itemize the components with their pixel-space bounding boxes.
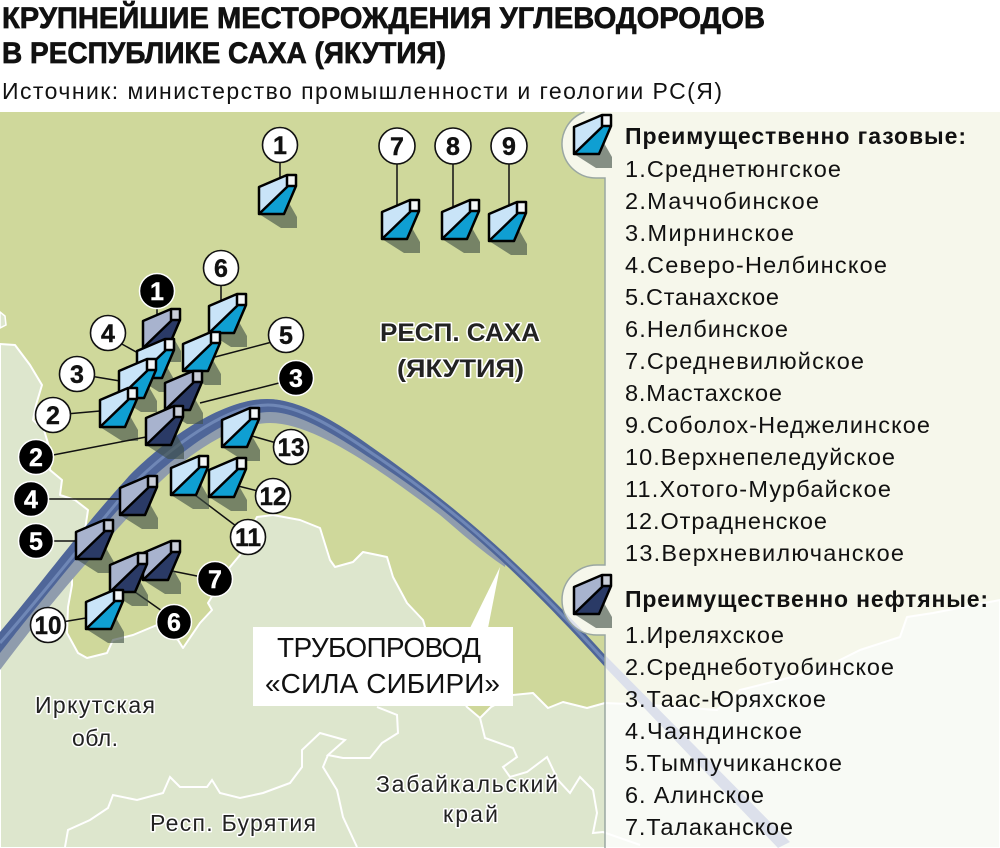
oil field 7 — [143, 541, 232, 596]
callout: pipeline label: «СИЛА СИБИРИ» — [265, 668, 500, 699]
legend: oil fields: 2.Среднеботуобинское — [625, 654, 894, 680]
legend: gas fields: 7.Средневилюйское — [625, 348, 864, 374]
legend: gas fields: 2.Маччобинское — [625, 188, 819, 214]
gas field 1 north: 1 — [273, 132, 287, 160]
gas field 10: 10 — [34, 612, 62, 640]
region label: Sakha: РЕСП. САХА — [380, 319, 540, 347]
gas field 12 — [209, 458, 290, 514]
gas field 6: 6 — [214, 255, 228, 283]
oil field 3: 3 — [289, 365, 303, 393]
gas field 9: 9 — [502, 133, 516, 161]
legend: gas fields: 13.Верхневилючанское — [625, 540, 904, 566]
region label: Buryatia: Респ. Бурятия — [150, 810, 316, 836]
pipeline "Power of Siberia" — [0, 399, 790, 848]
legend: gas fields: 10.Верхнепеледуйское — [625, 444, 895, 470]
legend: oil fields: 3.Таас-Юряхское — [625, 686, 826, 712]
gas field 13 — [222, 408, 308, 464]
legend: oil fields: 4.Чаяндинское — [625, 718, 802, 744]
gas field 4: 4 — [101, 320, 115, 348]
gas field 13: 13 — [278, 434, 304, 462]
panel edge — [562, 112, 605, 848]
legend: oil fields — [625, 586, 988, 840]
gas field 6 — [204, 250, 247, 347]
region label: Irkutsk: Иркутская — [35, 692, 155, 718]
legend: oil fields: 5.Тымпучиканское — [625, 750, 842, 776]
right legend panel — [562, 112, 1000, 848]
legend: gas fields — [625, 123, 966, 566]
source line: Источник: министерство промышленности и геологии РС(Я) — [2, 78, 722, 104]
region label: Sakha — [380, 319, 540, 383]
gas field 7: 7 — [390, 133, 404, 161]
gas field 5 — [183, 318, 304, 385]
gas field 8: 8 — [446, 133, 460, 161]
gas field 2 — [36, 388, 138, 441]
oil field 3 — [165, 360, 314, 424]
callout: pipeline label — [253, 567, 513, 706]
gas field 9 — [489, 128, 527, 255]
oil field 7: 7 — [208, 566, 222, 594]
oil field 6: 6 — [167, 609, 181, 637]
oil field 4: 4 — [24, 486, 38, 514]
legend: oil fields: Преимущественно нефтяные: — [625, 586, 988, 612]
legend: gas fields: 3.Мирнинское — [625, 220, 794, 246]
legend: gas fields: 8.Мастахское — [625, 380, 782, 406]
gas field 8 — [435, 128, 480, 253]
region label: Zabaikalsky: Забайкальский — [376, 771, 558, 797]
legend: gas fields: 9.Соболох-Неджелинское — [625, 412, 930, 438]
region label: Zabaikalsky — [376, 771, 558, 827]
oil field 4 — [14, 476, 158, 529]
region label: Zabaikalsky: край — [443, 801, 498, 827]
title — [2, 1, 765, 70]
legend: gas fields: 12.Отрадненское — [625, 508, 827, 534]
gas field 1 north — [259, 128, 298, 228]
legend: oil fields: 7.Талаканское — [625, 814, 793, 840]
legend: gas fields: 11.Хотого-Мурбайское — [625, 476, 891, 502]
oil field 5: 5 — [29, 528, 43, 556]
oil field 2 — [18, 406, 184, 474]
gas field 3: 3 — [70, 361, 84, 389]
region label: Irkutsk: обл. — [72, 725, 118, 751]
legend: gas fields: 6.Нелбинское — [625, 316, 788, 342]
map: neighbouring regions — [0, 312, 1000, 848]
oil field 1 — [140, 274, 181, 362]
oil field 6 — [110, 553, 192, 640]
gas field 11: 11 — [235, 524, 261, 552]
oil field 5 — [18, 520, 114, 573]
title: В РЕСПУБЛИКЕ САХА (ЯКУТИЯ) — [2, 37, 446, 70]
oil field 1: 1 — [150, 278, 164, 306]
oil field 2: 2 — [29, 444, 43, 472]
gas field 11 — [171, 456, 266, 554]
legend: gas fields: 5.Станахское — [625, 284, 779, 310]
gas field 7 — [379, 128, 420, 253]
gas field 3 — [60, 356, 157, 412]
gas field 4 — [90, 316, 175, 392]
legend: gas fields: 1.Среднетюнгское — [625, 156, 841, 182]
gas field 2: 2 — [46, 402, 60, 430]
region label: Irkutsk — [35, 692, 155, 751]
legend: gas fields: 4.Северо-Нелбинское — [625, 252, 887, 278]
title: КРУПНЕЙШИЕ МЕСТОРОЖДЕНИЯ УГЛЕВОДОРОДОВ — [2, 1, 765, 35]
legend: gas fields: Преимущественно газовые: — [625, 123, 966, 149]
region label: Sakha: (ЯКУТИЯ) — [397, 355, 524, 383]
legend: oil fields: 6. Алинское — [625, 782, 764, 808]
legend: oil fields: 1.Иреляхское — [625, 622, 784, 648]
icon: gas legend marker — [574, 115, 612, 168]
gas field 10 — [30, 590, 124, 643]
icon: oil legend marker — [574, 575, 612, 628]
callout: pipeline label: ТРУБОПРОВОД — [277, 632, 481, 663]
gas field 12: 12 — [260, 483, 286, 511]
gas field 5: 5 — [279, 322, 293, 350]
